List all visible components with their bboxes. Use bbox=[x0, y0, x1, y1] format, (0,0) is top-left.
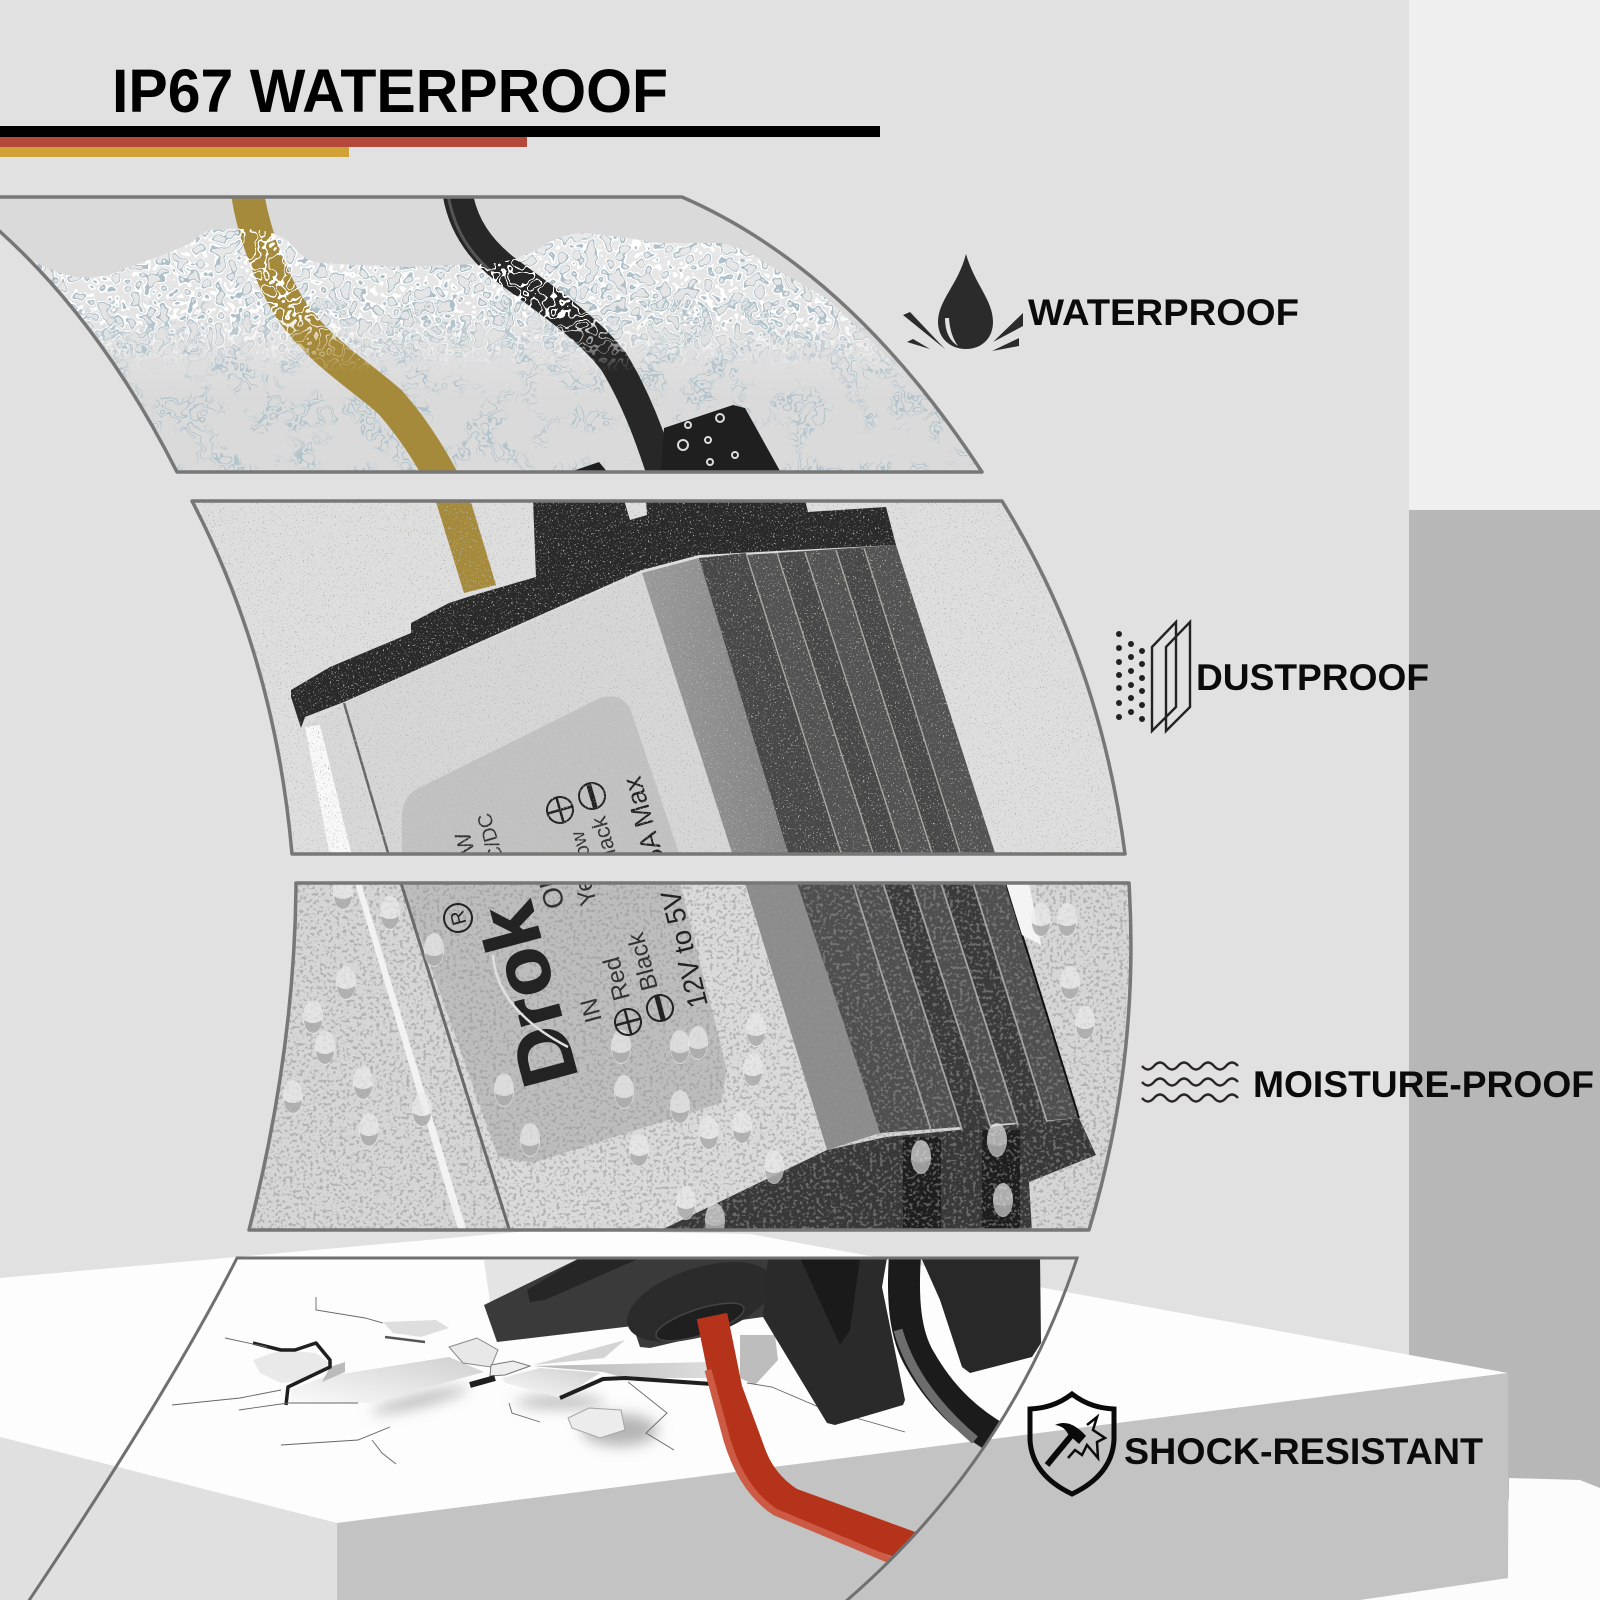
hairline cracks bbox=[172, 1297, 905, 1464]
panel: waterproof cutaway bbox=[0, 190, 1000, 480]
body left strip bbox=[302, 703, 389, 856]
black cable bbox=[457, 190, 664, 480]
label: dustproof: DUSTPROOF bbox=[1196, 657, 1429, 698]
label text: yellow: Yellow bbox=[559, 835, 603, 908]
icon: water drop bbox=[903, 254, 1023, 351]
fin outer edge bbox=[1006, 883, 1079, 1118]
icon: shield with hammer bbox=[1030, 1394, 1114, 1494]
label text: black: Black bbox=[585, 813, 625, 872]
label text: voltage: 12V to 5V bbox=[655, 887, 714, 1011]
end cap dark bars bbox=[903, 1130, 1020, 1232]
first black fin bbox=[763, 1258, 905, 1425]
fin shadow bbox=[800, 1258, 860, 1345]
icon: dust filter bbox=[1116, 622, 1190, 731]
label text: input type: C/DC bbox=[474, 811, 508, 864]
red cable highlight bbox=[708, 1370, 890, 1560]
label text: red: Red bbox=[598, 954, 636, 1003]
bevel bbox=[642, 558, 789, 856]
foam veil bbox=[33, 229, 858, 330]
brand logo: Drok bbox=[462, 894, 594, 1095]
gold cable bbox=[247, 190, 443, 480]
black end cap bbox=[657, 1118, 1096, 1232]
label text: current: 5A Max bbox=[617, 773, 671, 868]
label: moisture-proof: MOISTURE-PROOF bbox=[1253, 1064, 1594, 1105]
shadows under cracks bbox=[370, 1382, 658, 1446]
body top face bbox=[344, 573, 733, 856]
dust speckle bbox=[190, 500, 1130, 856]
fin lines bbox=[746, 548, 961, 856]
dense foam band outlines bbox=[38, 229, 883, 363]
plate dark edge bbox=[527, 1258, 640, 1302]
black cable highlight bbox=[448, 195, 492, 272]
fin stripes bbox=[883, 883, 1047, 1130]
icon: plus terminal bbox=[546, 796, 574, 824]
red cable bbox=[712, 1316, 925, 1552]
registered mark bbox=[441, 901, 475, 935]
title underline bars bbox=[0, 126, 880, 157]
large water droplets bbox=[283, 876, 1095, 1237]
label: waterproof: WATERPROOF bbox=[1028, 292, 1299, 333]
panel: dustproof cutaway bbox=[190, 499, 1127, 856]
panel: moisture-proof cutaway bbox=[247, 881, 1133, 1232]
sparse lower bubbles bbox=[60, 300, 990, 480]
black end cap bbox=[291, 500, 896, 728]
water foam highlights bbox=[36, 228, 892, 370]
background: light right column bbox=[1409, 0, 1600, 510]
label plate bbox=[402, 696, 680, 856]
registered mark: R bbox=[446, 908, 471, 928]
icon: minus terminal bbox=[578, 782, 606, 810]
label text: wattage: W bbox=[450, 829, 480, 856]
gold cable bbox=[436, 502, 496, 593]
body edge line bbox=[401, 883, 510, 1232]
black connector block bbox=[664, 405, 780, 470]
title: IP67 WATERPROOF bbox=[112, 57, 668, 125]
body highlight bbox=[305, 725, 352, 856]
fin stripes bbox=[699, 548, 961, 856]
cracked surface bbox=[253, 1320, 778, 1438]
bevel bbox=[745, 883, 880, 1150]
black cable highlight bbox=[898, 1330, 975, 1440]
panel: shock-resistant cutaway bbox=[28, 1246, 1077, 1600]
grommet ring bbox=[652, 1295, 748, 1349]
second black fin bbox=[920, 1255, 1041, 1373]
body highlight bbox=[355, 883, 467, 1232]
label text: out: OUT bbox=[528, 848, 568, 904]
background: grey right column bbox=[1409, 510, 1600, 1500]
dark fissures bbox=[253, 1337, 712, 1405]
icon: minus terminal bbox=[644, 992, 676, 1024]
black connector tip bbox=[574, 462, 606, 470]
label text: out: OUT bbox=[526, 847, 571, 912]
bead texture bbox=[245, 880, 1135, 1232]
finned side bbox=[797, 883, 1079, 1133]
fin lines bbox=[853, 883, 1047, 1133]
label text: black: Black bbox=[622, 929, 664, 993]
body face bbox=[401, 883, 827, 1232]
label text: in: IN bbox=[576, 995, 608, 1025]
label text: yellow: Yellow bbox=[567, 828, 604, 890]
label: shock-resistant: SHOCK-RESISTANT bbox=[1124, 1431, 1483, 1472]
plinth block bbox=[0, 1230, 1600, 1600]
base plate bbox=[484, 1258, 775, 1348]
label plate bbox=[401, 883, 727, 1163]
body remnant behind cap bbox=[484, 1260, 580, 1302]
white sliver beside fins bbox=[1006, 883, 1041, 945]
icon: plus terminal bbox=[612, 1006, 644, 1038]
bubbles on connector bbox=[678, 414, 738, 465]
black cable bbox=[904, 1255, 1000, 1440]
icon: moisture waves bbox=[1142, 1062, 1238, 1102]
body edge line bbox=[344, 703, 389, 856]
grommet bbox=[617, 1246, 783, 1358]
finned side bbox=[699, 545, 996, 856]
